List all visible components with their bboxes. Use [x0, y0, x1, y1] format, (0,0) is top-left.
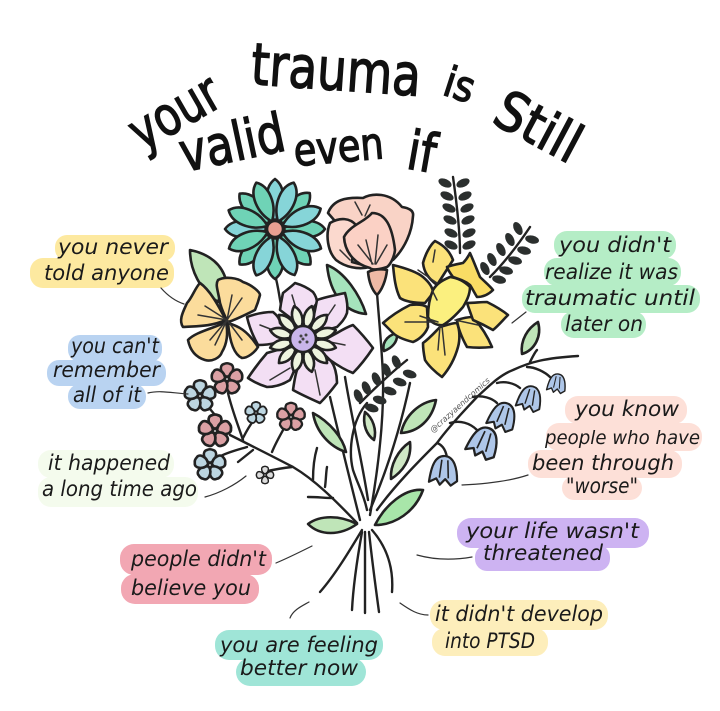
- watermark: @crazyaendcomics: [428, 376, 492, 434]
- callout: you know people who have been through worse: people who have: [544, 427, 700, 449]
- callout: you didn't realize it was traumatic until later on: you didn't: [558, 233, 672, 257]
- callout: it didn't develop into PTSD: into PTSD: [445, 629, 535, 653]
- callout: it didn't develop into PTSD: [400, 600, 608, 656]
- flower: lilac: [247, 283, 373, 403]
- callout: your life wasn't threatened: your life wasn't: [465, 519, 640, 543]
- title: Still: [484, 78, 593, 176]
- flower: peach: [181, 278, 260, 361]
- title: if: [403, 119, 443, 186]
- flower: pink poppy: [328, 195, 413, 295]
- title: valid: [174, 101, 290, 185]
- lavender sprigs: [348, 176, 542, 418]
- callout: it happened a long time ago: a long time ago: [42, 477, 197, 501]
- callout: you can't remember all of it: all of it: [73, 383, 142, 407]
- callout: you can't remember all of it: remember: [53, 358, 161, 382]
- callout: it happened a long time ago: [38, 450, 246, 507]
- title: [117, 30, 593, 186]
- callout: you can't remember all of it: you can't: [70, 334, 160, 358]
- callout: you know people who have been through worse: you know: [574, 397, 680, 421]
- callout: you didn't realize it was traumatic until later on: [512, 231, 700, 338]
- callout: you never told anyone: you never: [57, 235, 169, 259]
- callout: people didn't believe you: believe you: [131, 576, 251, 600]
- callout: your life wasn't threatened: [417, 518, 649, 571]
- callout: people didn't believe you: [120, 544, 312, 604]
- callout: your life wasn't threatened: threatened: [483, 541, 604, 565]
- callout: you never told anyone: told anyone: [44, 261, 169, 285]
- callout: you are feeling better now: [215, 602, 383, 686]
- callout: you are feeling better now: better now: [240, 656, 359, 680]
- small blue flowers: [183, 380, 274, 484]
- callout: you know people who have been through worse: been through: [532, 451, 674, 475]
- title: your: [117, 60, 232, 163]
- callout: you know people who have been through worse: "worse": [566, 474, 638, 498]
- callout: you are feeling better now: you are feeling: [219, 633, 378, 657]
- callout: you can't remember all of it: [47, 334, 188, 409]
- bouquet stems: [205, 177, 578, 613]
- leaves: [190, 250, 539, 533]
- callout: it didn't develop into PTSD: it didn't develop: [435, 602, 603, 626]
- callout: it happened a long time ago: it happened: [48, 451, 171, 475]
- flower: teal daisy: [225, 179, 325, 279]
- callout: people didn't believe you: people didn't: [130, 547, 267, 571]
- title: trauma: [249, 30, 423, 110]
- callout: you never told anyone: [30, 235, 184, 304]
- bluebells: [429, 372, 568, 486]
- title: is: [438, 57, 482, 113]
- small red flowers: [197, 363, 306, 448]
- callout: you didn't realize it was traumatic until later on: later on: [565, 312, 643, 336]
- callout: you didn't realize it was traumatic until later on: realize it was: [545, 260, 678, 284]
- flower: lilac centre: [269, 305, 337, 373]
- callout: you know people who have been through worse: [462, 396, 702, 500]
- callout: you didn't realize it was traumatic until later on: traumatic until: [525, 286, 695, 310]
- flower: yellow daffodil: [383, 241, 508, 377]
- title: even: [292, 118, 386, 177]
